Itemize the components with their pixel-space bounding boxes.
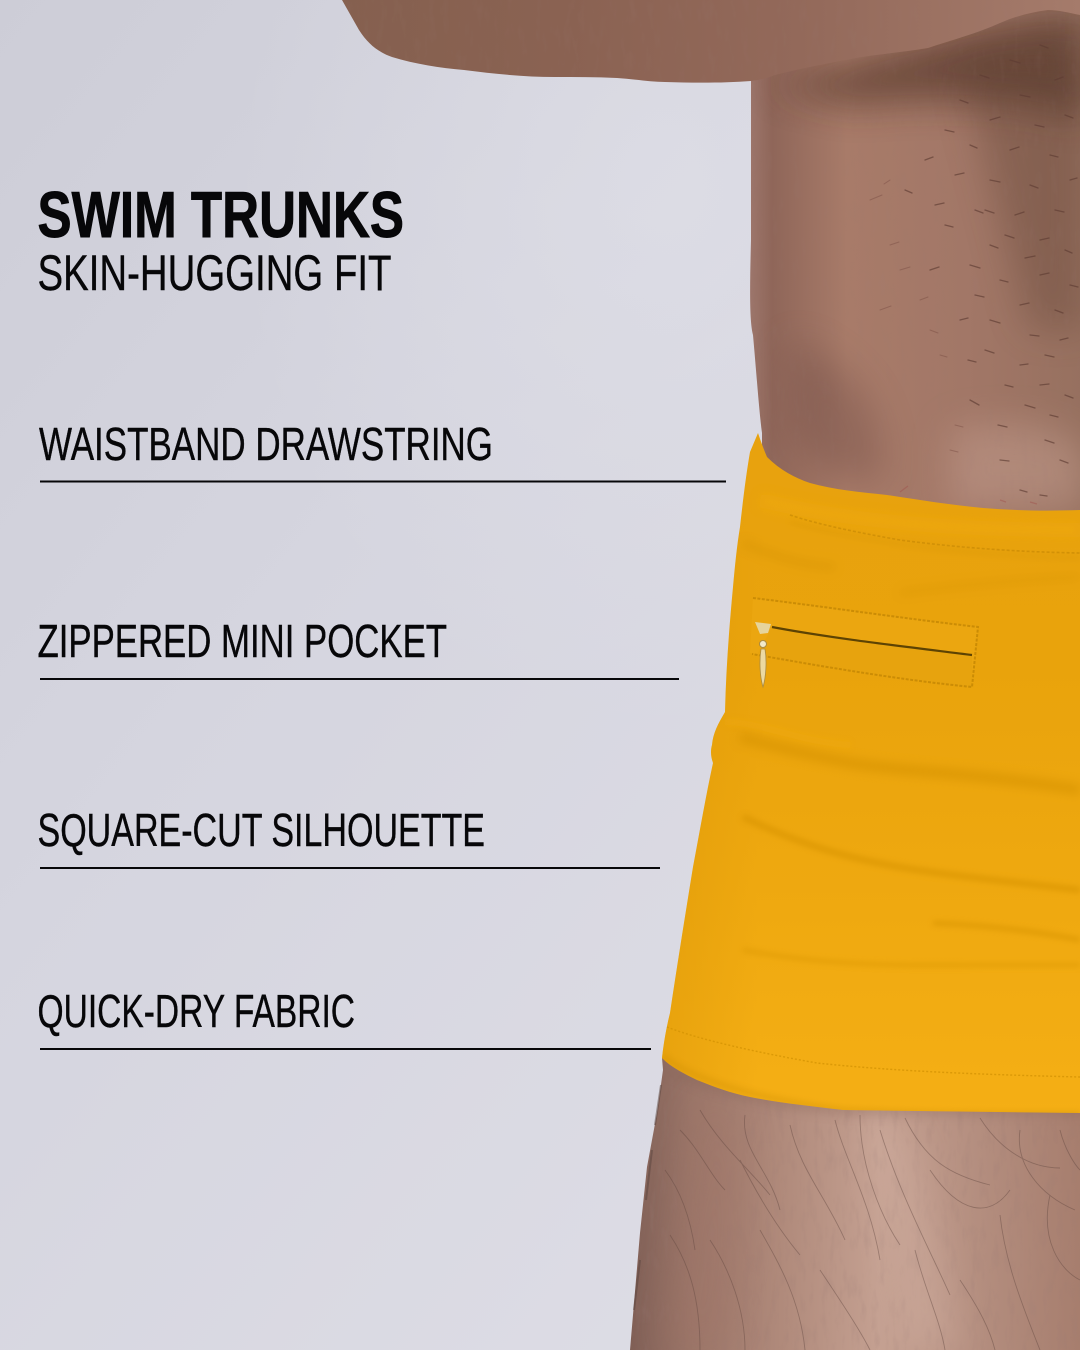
feature: square-cut silhouette: SQUARE-CUT SILHOUETTE	[38, 804, 485, 856]
body hair flecks	[905, 45, 1078, 496]
photo: thigh	[625, 1055, 1080, 1350]
waistband and hem stitching	[790, 515, 1080, 553]
feature: quick-dry fabric: QUICK-DRY FABRIC	[38, 985, 355, 1037]
icon: zipper pull	[755, 622, 771, 687]
subtitle: SKIN-HUGGING FIT	[38, 245, 392, 301]
title: SWIM TRUNKS	[38, 178, 404, 251]
photo: folded arm	[342, 0, 1080, 83]
feature: waistband drawstring: WAISTBAND DRAWSTRING	[39, 418, 493, 470]
photo: zippered mini pocket	[750, 598, 978, 687]
photo: model torso	[745, 0, 1080, 535]
feature: zippered mini pocket: ZIPPERED MINI POCKET	[38, 615, 447, 667]
photo: yellow swim trunks	[650, 425, 1080, 1120]
fabric highlights and wrinkles	[760, 500, 1080, 530]
